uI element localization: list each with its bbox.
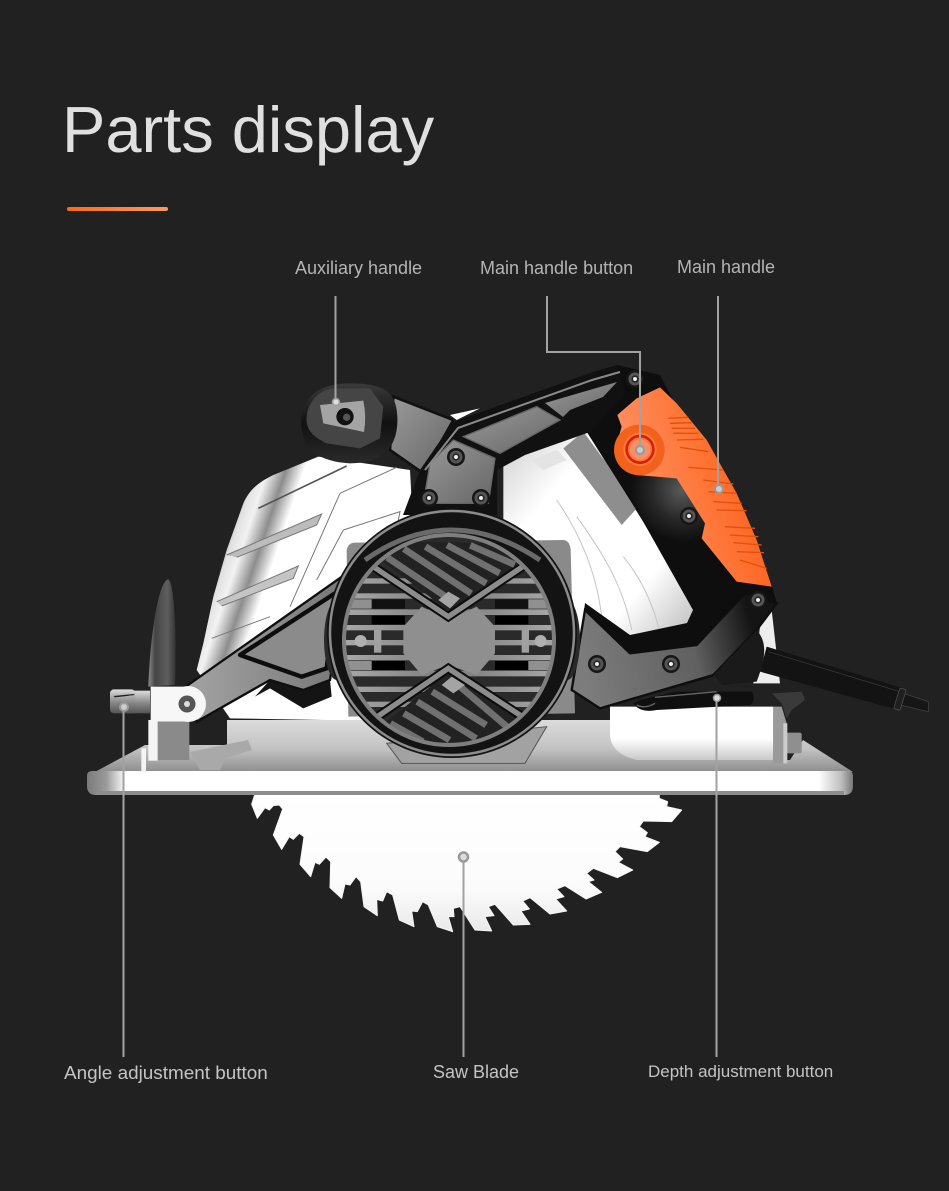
leader line: saw blade <box>459 852 468 1057</box>
leader line: depth adjustment button <box>714 694 720 1057</box>
base plate <box>87 771 853 795</box>
base lever <box>190 740 252 770</box>
handle body <box>575 365 777 709</box>
leader line: angle adjustment button <box>120 703 128 1057</box>
leader line: main handle <box>715 296 723 493</box>
rear bracket and nut <box>772 692 805 763</box>
label: auxiliary handle: Auxiliary handle <box>295 258 422 278</box>
label: saw blade: Saw Blade <box>433 1062 519 1082</box>
label: main handle: Main handle <box>677 257 775 277</box>
base plate top surface <box>93 720 853 773</box>
main handle orange grip <box>615 387 772 587</box>
saw blade <box>252 794 682 932</box>
right arm <box>572 593 777 708</box>
angle bracket <box>110 687 190 772</box>
upper frame arch <box>403 365 625 515</box>
auxiliary knob arm <box>390 397 453 473</box>
left guard shroud <box>197 457 423 722</box>
screws <box>420 370 767 673</box>
main handle button <box>614 425 665 475</box>
pin <box>130 691 150 713</box>
blade guard white cylinder <box>610 707 773 760</box>
motor back plate <box>347 540 575 717</box>
accent underline <box>67 207 168 211</box>
depth adjustment knob <box>633 692 754 711</box>
motor housing <box>324 508 580 758</box>
auxiliary handle knob <box>301 383 397 463</box>
label: angle adjustment button: Angle adjustment button <box>64 1063 268 1084</box>
label: depth adjustment button: Depth adjustment button <box>648 1062 833 1081</box>
grey slab on shroud <box>563 432 638 525</box>
arm pivot with bolt <box>170 686 206 722</box>
power cord <box>713 630 928 712</box>
leader line: main handle button <box>547 296 644 454</box>
motor foot <box>387 727 547 763</box>
leader line: auxiliary handle <box>332 296 340 406</box>
left arm <box>183 573 347 722</box>
title: Parts display <box>62 93 435 166</box>
label: main handle button: Main handle button <box>480 258 633 278</box>
depth fence plate <box>148 579 176 687</box>
right guard shroud <box>450 408 780 683</box>
motor grille <box>346 537 552 743</box>
circular saw illustration <box>87 365 928 932</box>
